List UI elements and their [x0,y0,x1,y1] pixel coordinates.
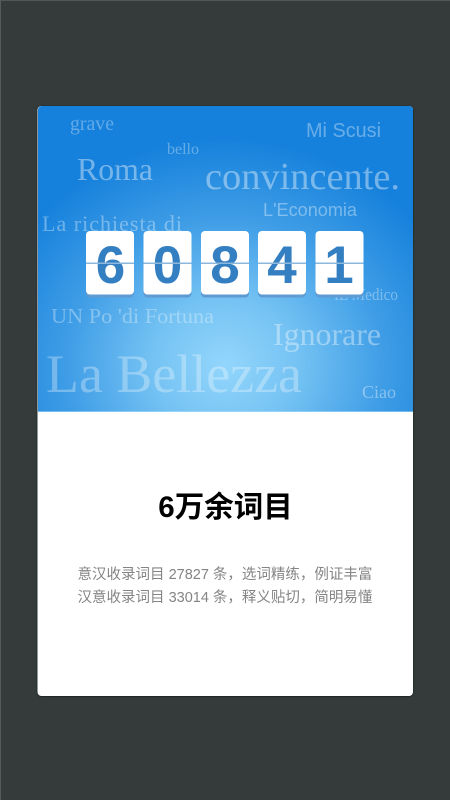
word: Il Medico: IL Medico [334,285,398,304]
word: UN Po 'di Fortuna: UN Po 'di Fortuna [51,304,214,328]
flip counter 60841 [86,231,364,298]
description text: 意汉收录词目 27827 条，选词精练，例证丰富 [78,565,372,583]
digit tile 4 [258,231,306,298]
digit tile 1: 1 [324,236,354,295]
word: Ignorare: Ignorare [273,316,381,352]
word: Roma: Roma [77,151,153,187]
digit tile 8: 8 [210,236,240,295]
digit tile 1 [316,231,364,298]
digit tile 0: 0 [153,236,182,295]
word: La richiesta di: La richiesta di [42,211,182,236]
digit tile 6 [86,231,134,298]
panel: blue word cloud banner [37,106,414,412]
word: convincente.: convincente. [205,156,400,198]
digit tile 8 [201,231,249,298]
word: Ciao: Ciao [362,382,396,402]
digit tile 0 [144,231,192,298]
word: grave: grave [70,114,114,135]
digit tile 4: 4 [267,236,297,295]
panel: card [37,106,414,697]
word: bello: bello [167,141,199,158]
word: Mi Scusi: Mi Scusi [306,120,381,142]
word: La Bellezza: La Bellezza [46,344,302,404]
digit tile 6: 6 [96,236,125,295]
heading: 6万余词目 [158,491,293,524]
description text: 汉意收录词目 33014 条，释义贴切，简明易懂 [78,588,372,606]
word: L'Economia: L'Economia [263,200,358,220]
description text [78,565,372,606]
